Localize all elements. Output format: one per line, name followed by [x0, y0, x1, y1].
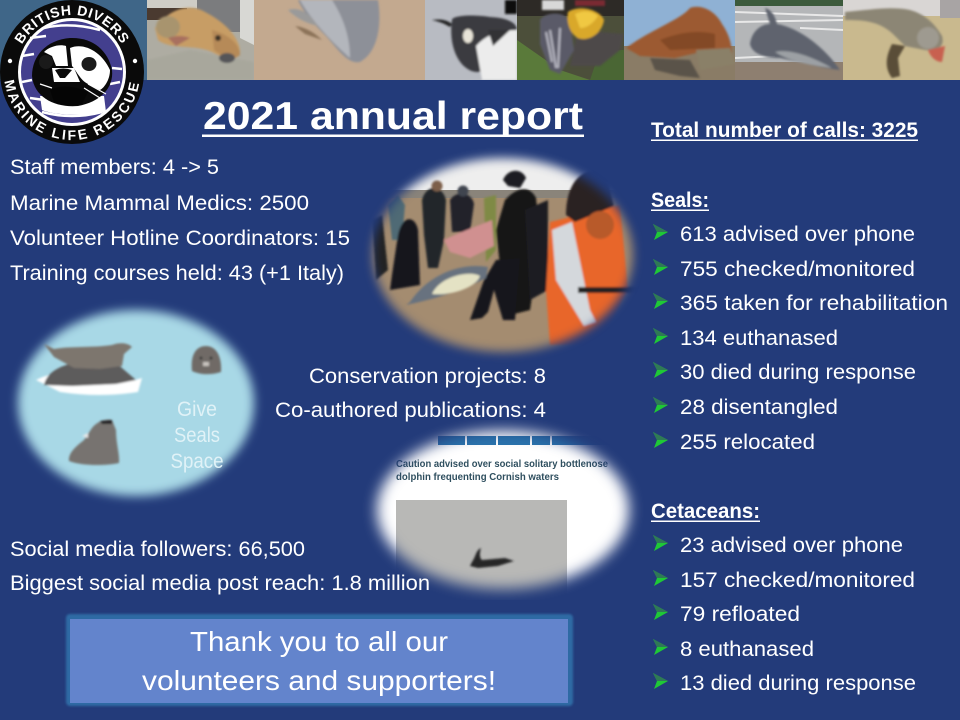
seals list: 613 advised over phone — [680, 223, 915, 246]
photo: seal pup by fence — [147, 0, 254, 80]
social media stats: Biggest social media post reach: 1.8 million — [10, 572, 430, 595]
total calls heading: Total number of calls: 3225 — [651, 119, 918, 142]
article photo: dolphin fin — [396, 500, 567, 600]
article headline — [396, 460, 608, 482]
text: Give Seals Space: Space — [170, 450, 224, 473]
title: 2021 annual report — [203, 95, 583, 138]
panel: cetaceans stats — [651, 500, 916, 695]
photo strip — [0, 0, 960, 80]
article headline: Caution advised over social solitary bottlenose — [396, 458, 608, 470]
social media stats — [10, 538, 430, 595]
seal raising head — [69, 419, 119, 465]
logo ring text — [4, 5, 139, 140]
logo wave stripes — [22, 25, 122, 116]
seals list: 365 taken for rehabilitation — [680, 292, 948, 315]
cetaceans list: 13 died during response — [680, 672, 916, 695]
thank you callout — [66, 614, 573, 706]
conservation and publications stats: Co-authored publications: 4 — [275, 399, 546, 422]
illustration: Give Seals Space — [18, 310, 254, 496]
text: Give Seals Space — [170, 398, 224, 473]
staff and training stats: Volunteer Hotline Coordinators: 15 — [10, 227, 350, 250]
logo: British Divers Marine Life Rescue — [0, 0, 144, 144]
staff and training stats: Marine Mammal Medics: 2500 — [10, 192, 309, 215]
staff and training stats: Staff members: 4 -> 5 — [10, 156, 219, 179]
panel: seals stats — [651, 189, 948, 454]
cetaceans heading: Cetaceans: — [651, 500, 760, 523]
photo: grey seal pup — [843, 0, 960, 80]
seals heading: Seals: — [651, 189, 709, 212]
seals list: 255 relocated — [680, 431, 815, 454]
text: Give Seals Space: Give — [177, 398, 217, 421]
cetaceans list — [653, 534, 916, 695]
cetaceans list: 8 euthanased — [680, 638, 814, 661]
text: Give Seals Space: Seals — [174, 424, 220, 447]
photo: orca — [425, 0, 517, 80]
article headline: dolphin frequenting Cornish waters — [396, 471, 559, 483]
seals list — [653, 223, 948, 454]
cetaceans list: 79 refloated — [680, 603, 800, 626]
news article screenshot — [360, 420, 650, 600]
photo: brown seal on rocks — [624, 0, 735, 80]
seal on rock — [36, 343, 142, 395]
logo backdrop — [0, 0, 147, 80]
thank you callout: Thank you to all our — [190, 626, 448, 657]
photo: stranded dolphin in shallows — [735, 0, 843, 80]
thank you callout: volunteers and supporters! — [142, 665, 496, 696]
photo: stranded porpoise — [254, 0, 425, 80]
social media stats: Social media followers: 66,500 — [10, 538, 305, 561]
logo seal face — [32, 38, 112, 115]
staff and training stats — [10, 156, 350, 285]
conservation and publications stats: Conservation projects: 8 — [309, 365, 546, 388]
article nav bar — [438, 436, 610, 445]
photo: volunteers around stranded dolphin — [366, 150, 640, 359]
cetaceans list: 157 checked/monitored — [680, 569, 915, 592]
seal head right — [192, 346, 221, 374]
logo ring text: MARINE LIFE RESCUE — [4, 80, 139, 140]
photo: whale calf and yellow bucket — [517, 0, 624, 80]
cetaceans list: 23 advised over phone — [680, 534, 903, 557]
seals list: 30 died during response — [680, 361, 916, 384]
seals list: 755 checked/monitored — [680, 258, 915, 281]
seals list: 28 disentangled — [680, 396, 838, 419]
staff and training stats: Training courses held: 43 (+1 Italy) — [10, 262, 344, 285]
logo ring text: BRITISH DIVERS — [14, 5, 128, 44]
conservation and publications stats — [275, 365, 546, 422]
seals list: 134 euthanased — [680, 327, 838, 350]
